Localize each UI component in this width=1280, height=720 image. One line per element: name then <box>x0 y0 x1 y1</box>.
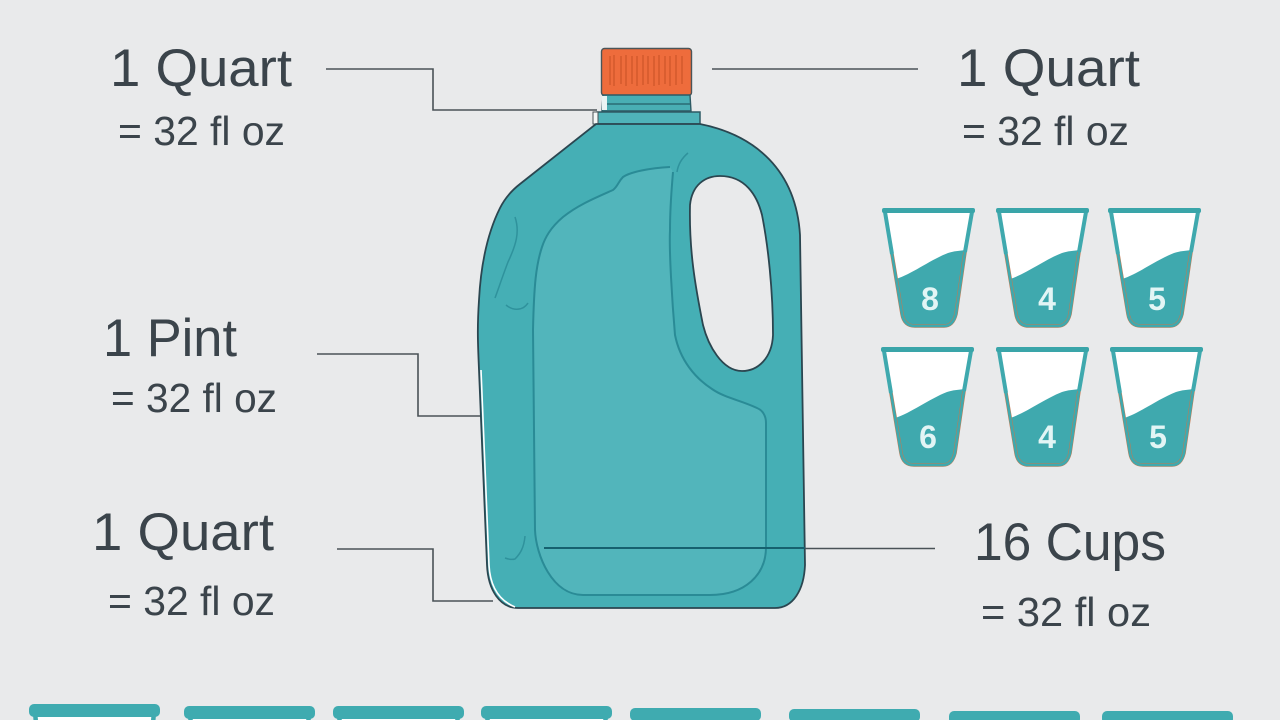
cup 4 second row: 4 <box>1038 419 1056 455</box>
label: bottom left quart: = 32 fl oz <box>108 578 275 624</box>
leader line: top right quart <box>712 68 918 70</box>
bottle cap <box>602 48 692 96</box>
label: top right quart: = 32 fl oz <box>962 108 1129 154</box>
cup 6 <box>881 347 974 465</box>
leader line: 16 cups <box>544 547 935 550</box>
cup 5 <box>1108 208 1201 326</box>
label: top left quart <box>110 39 292 154</box>
label: 16 cups: = 32 fl oz <box>981 589 1151 635</box>
label: bottom left quart: 1 Quart <box>92 503 274 562</box>
leader line: pint <box>317 354 480 416</box>
white edge highlight <box>481 370 515 607</box>
bottle neck threads <box>593 95 700 124</box>
cup grid <box>881 208 1203 465</box>
leader line: bottom left quart <box>337 549 493 601</box>
cup 8 <box>882 208 975 326</box>
label: pint <box>103 309 277 421</box>
bottle body <box>478 124 805 608</box>
bottom row of cups <box>29 704 1233 720</box>
label: pint: 1 Pint <box>103 309 237 368</box>
label: pint: = 32 fl oz <box>111 375 277 421</box>
cup 5 second row <box>1110 347 1203 465</box>
bottle crease marks <box>495 153 688 559</box>
cup 6: 6 <box>919 419 937 455</box>
label: bottom left quart <box>92 503 275 624</box>
label: top left quart: = 32 fl oz <box>118 108 285 154</box>
leader line: top left quart <box>326 69 597 110</box>
label: top left quart: 1 Quart <box>110 39 292 98</box>
cup 4 second row <box>996 347 1089 465</box>
label: 16 cups: 16 Cups <box>974 513 1166 572</box>
label: top right quart <box>957 39 1140 154</box>
cup 5: 5 <box>1148 281 1166 317</box>
bottle jug <box>478 48 805 608</box>
label: 16 cups <box>974 513 1166 635</box>
cup 4 <box>996 208 1089 326</box>
cup 5 second row: 5 <box>1149 419 1167 455</box>
cup 8: 8 <box>921 281 939 317</box>
bottle inner panel <box>533 167 766 595</box>
label: top right quart: 1 Quart <box>957 39 1140 98</box>
cup 4: 4 <box>1038 281 1056 317</box>
